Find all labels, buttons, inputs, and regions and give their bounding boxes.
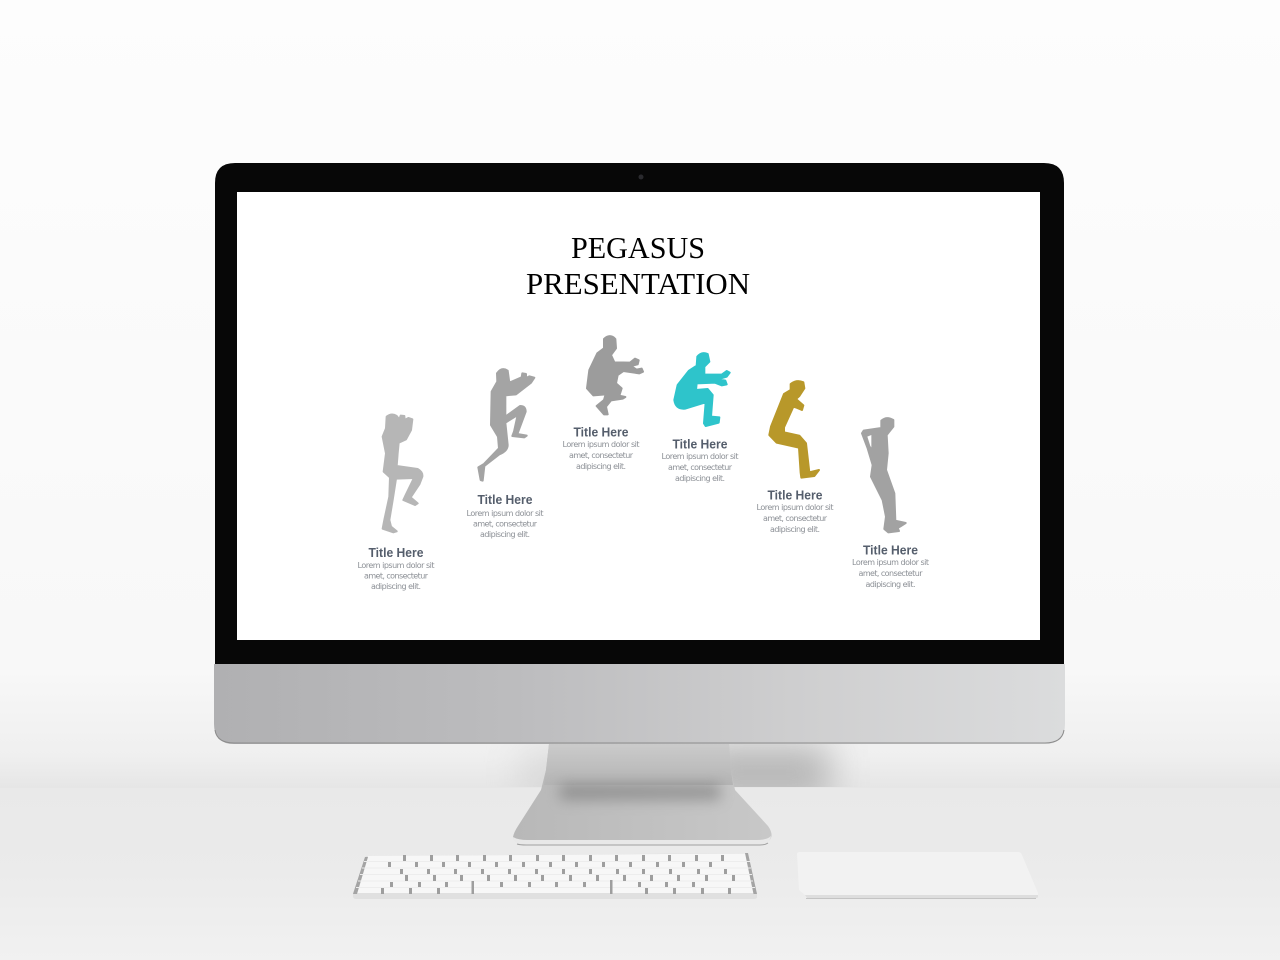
text: item 4: adipiscing elit.: [675, 474, 725, 483]
text: item 2: [466, 493, 544, 539]
text: item 1: amet, consectetur: [364, 572, 429, 580]
monitor chin: [214, 664, 1065, 744]
figure 5: gold half squat: [769, 381, 819, 478]
figure 3: gray crouch: [587, 336, 643, 414]
monitor bezel: [215, 163, 1064, 665]
camera: [638, 174, 644, 180]
title: PEGASUS: [571, 230, 705, 265]
text: item 1: [358, 546, 434, 591]
text: item 5: adipiscing elit.: [770, 525, 820, 534]
text: item 4: Title Here: [672, 438, 728, 452]
text: item 2: Title Here: [478, 493, 533, 507]
monitor stand: [513, 744, 772, 845]
text: item 3: adipiscing elit.: [576, 462, 626, 471]
figure 2: gray jumper: [478, 369, 534, 481]
monitor: [214, 163, 1065, 744]
text: item 5: Lorem ipsum dolor sit: [756, 503, 834, 512]
figure 1: gray runner: [383, 414, 422, 532]
figure 4: teal crouch: [674, 353, 730, 426]
text: item 1: adipiscing elit.: [371, 582, 421, 591]
title: PRESENTATION: [526, 266, 750, 301]
text: item 4: amet, consectetur: [668, 463, 733, 472]
text: item 2: Lorem ipsum dolor sit: [466, 509, 544, 518]
figure 6: gray standing: [862, 418, 906, 532]
screen: [237, 192, 1040, 640]
text: item 6: [852, 544, 929, 589]
text: item 5: Title Here: [768, 488, 823, 502]
text: item 1: Title Here: [368, 546, 424, 560]
text: item 4: [662, 438, 738, 483]
text: item 1: Lorem ipsum dolor sit: [358, 561, 434, 570]
text: item 2: amet, consectetur: [473, 520, 538, 528]
trackpad: [797, 852, 1038, 898]
title: [526, 230, 750, 301]
keyboard: [353, 853, 757, 899]
text: item 3: amet, consectetur: [569, 451, 634, 460]
stand shadow on wall: [522, 744, 846, 787]
text: item 5: amet, consectetur: [763, 514, 828, 523]
text: item 6: Lorem ipsum dolor sit: [852, 558, 929, 567]
text: item 3: Title Here: [574, 426, 629, 440]
text: item 3: Lorem ipsum dolor sit: [562, 440, 640, 449]
text: item 2: adipiscing elit.: [480, 530, 530, 539]
text: item 6: adipiscing elit.: [866, 580, 916, 589]
text: item 3: [562, 426, 640, 471]
text: item 6: amet, consectetur: [858, 569, 923, 578]
background: desk: [0, 788, 1280, 960]
key gaps: [381, 855, 735, 894]
text: item 6: Title Here: [863, 544, 918, 558]
text: item 4: Lorem ipsum dolor sit: [662, 452, 738, 461]
text: item 5: [756, 488, 834, 534]
